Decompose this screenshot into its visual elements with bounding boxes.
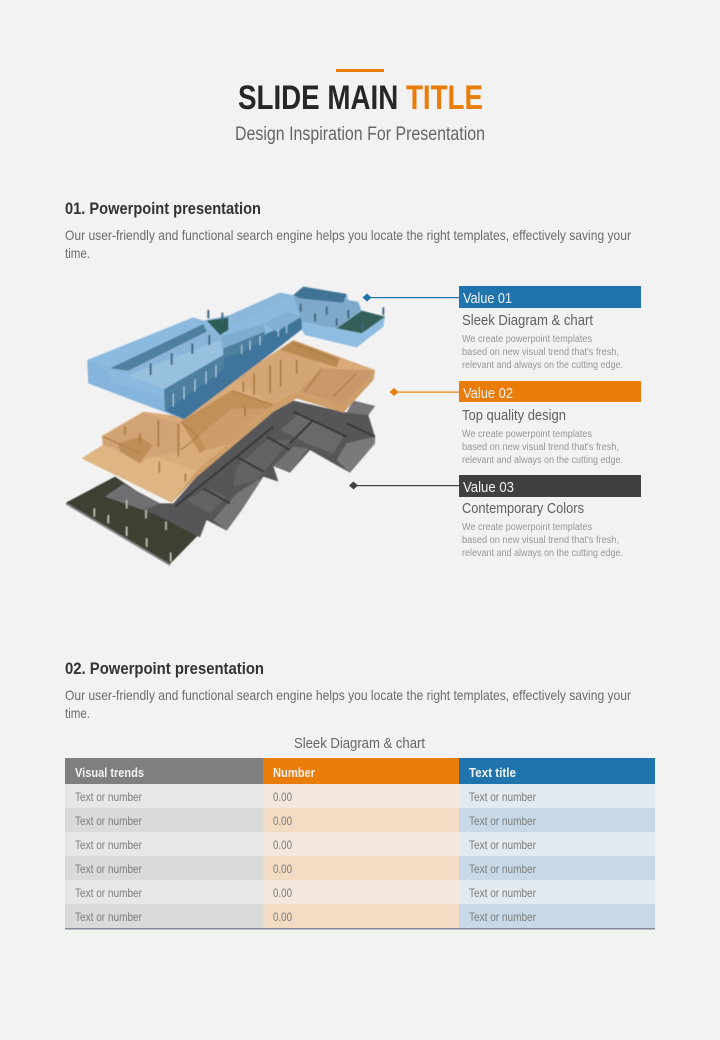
value 03 block: Contemporary Colors [462, 500, 584, 517]
section 1 body text: Our user-friendly and functional search engine helps you locate the right templates, effectively saving your [65, 227, 631, 243]
section 1 heading: 01. Powerpoint presentation [65, 199, 261, 218]
table header: Number [273, 765, 315, 780]
value 02 block: relevant and always on the cutting edge. [462, 455, 623, 466]
value 02 block [459, 381, 641, 466]
callout connector 01 [362, 294, 459, 302]
table header [65, 758, 655, 784]
table title: Sleek Diagram & chart [294, 735, 426, 752]
table rows: Text or number [75, 838, 142, 852]
table rows: 0.00 [273, 814, 292, 828]
table rows: Text or number [469, 862, 536, 876]
table rows: Text or number [469, 910, 536, 924]
section 2 heading: 02. Powerpoint presentation [65, 659, 264, 678]
section 2 body text: Our user-friendly and functional search engine helps you locate the right templates, effectively saving your [65, 687, 631, 703]
value 02 block: Value 02 [463, 385, 513, 402]
title accent bar [336, 69, 384, 72]
table rows: Text or number [75, 886, 142, 900]
value 02 block: We create powerpoint templates [462, 429, 592, 440]
section 1 body text: time. [65, 245, 90, 261]
table rows: 0.00 [273, 886, 292, 900]
table rows: Text or number [75, 910, 142, 924]
value 01 block [459, 286, 641, 371]
table rows: Text or number [469, 790, 536, 804]
callout connector 02 [390, 388, 459, 396]
value 01 block: Value 01 [463, 290, 512, 307]
callout connector 03 [349, 482, 459, 490]
value 01 block: We create powerpoint templates [462, 334, 592, 345]
table rows: Text or number [75, 790, 142, 804]
value 03 block: based on new visual trend that's fresh, [462, 535, 619, 546]
value 03 block: Value 03 [463, 479, 514, 496]
table rows: Text or number [469, 886, 536, 900]
value 03 block: relevant and always on the cutting edge. [462, 548, 623, 559]
table rows: Text or number [75, 862, 142, 876]
value 02 block: based on new visual trend that's fresh, [462, 442, 619, 453]
table rows: Text or number [75, 814, 142, 828]
table rows: 0.00 [273, 862, 292, 876]
table rows: 0.00 [273, 790, 292, 804]
building exploded illustration [66, 287, 385, 566]
table rows: 0.00 [273, 838, 292, 852]
ground layer [66, 401, 375, 566]
section 2 body text: time. [65, 705, 90, 721]
subtitle: Design Inspiration For Presentation [235, 124, 485, 145]
table header: Visual trends [75, 765, 144, 780]
title: SLIDE MAIN TITLE [238, 79, 483, 117]
value 03 block [459, 475, 641, 559]
timber layer [82, 340, 375, 503]
value 01 block: Sleek Diagram & chart [462, 312, 594, 329]
table rows [65, 784, 655, 930]
table rows: Text or number [469, 814, 536, 828]
table rows: 0.00 [273, 910, 292, 924]
section 2 body text [65, 687, 631, 721]
table rows: Text or number [469, 838, 536, 852]
blue layer [87, 287, 385, 419]
value 02 block: Top quality design [462, 407, 566, 424]
section 1 body text [65, 227, 631, 261]
table header: Text title [469, 765, 516, 780]
value 03 block: We create powerpoint templates [462, 522, 592, 533]
value 01 block: based on new visual trend that's fresh, [462, 347, 619, 358]
table [65, 758, 655, 930]
value 01 block: relevant and always on the cutting edge. [462, 360, 623, 371]
